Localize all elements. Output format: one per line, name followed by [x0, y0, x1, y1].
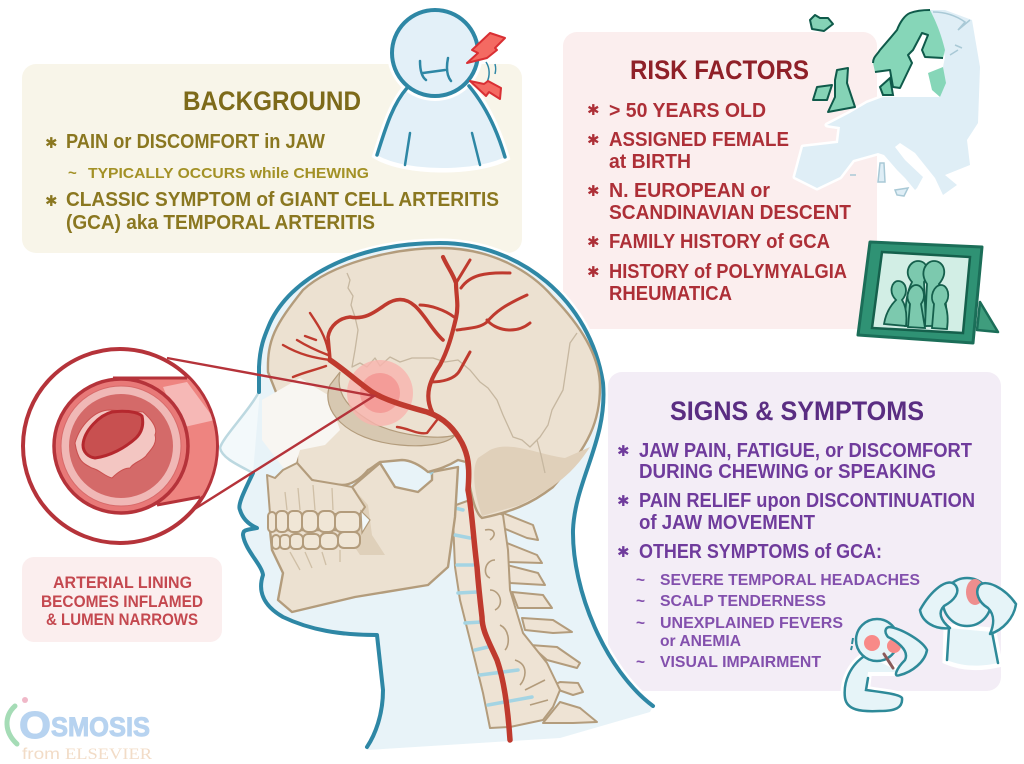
corsica sardinia sicily: [850, 163, 908, 196]
icon: person holding head: [920, 578, 1016, 666]
jaw joint cartilage: [430, 458, 466, 474]
heading: risk factors: RISK FACTORS: [630, 55, 809, 85]
heading: background: BACKGROUND: [183, 86, 361, 116]
symptoms list: ✱: [617, 543, 630, 561]
risk factor list: ✱: [587, 101, 600, 119]
symptoms list: OTHER SYMPTOMS of GCA:: [639, 541, 882, 563]
cranium: [268, 248, 600, 518]
symptoms list: SCALP TENDERNESS: [660, 593, 826, 610]
skull sutures: [347, 273, 577, 473]
icon: person with fever: [845, 619, 927, 711]
panel: arterial lining caption: & LUMEN NARROWS: [46, 611, 198, 629]
symptoms list: ~: [636, 615, 645, 632]
inflamed plaque: [75, 410, 156, 478]
zoom lines to magnified artery: [167, 358, 374, 510]
panel: risk factors: [563, 32, 877, 329]
symptoms list: ~: [636, 654, 645, 671]
risk factor list: ✱: [587, 233, 600, 251]
risk factor list: ASSIGNED FEMALE: [609, 129, 789, 151]
risk factor list: ✱: [587, 182, 600, 200]
symptoms list: ✱: [617, 492, 630, 510]
icon: person with jaw pain: [377, 10, 505, 168]
risk factor list: HISTORY of POLYMYALGIA: [609, 261, 847, 283]
maxilla: [267, 463, 365, 514]
background text: ✱: [45, 134, 58, 152]
logo wordmark: [19, 705, 150, 747]
panel: arterial lining caption: BECOMES INFLAMED: [41, 593, 203, 611]
risk factor list: N. EUROPEAN or: [609, 180, 770, 202]
background text: ~: [68, 165, 77, 182]
shaded back of skull: [474, 447, 590, 516]
background text: TYPICALLY OCCURS while CHEWING: [88, 165, 369, 182]
eye socket crescent: [328, 372, 455, 446]
background text: (GCA) aka TEMPORAL ARTERITIS: [66, 212, 375, 234]
cervical spine: [453, 500, 597, 728]
mandible shading: [350, 487, 385, 555]
logo subtext: [22, 746, 152, 763]
family silhouettes: [884, 261, 948, 329]
risk factor list: FAMILY HISTORY of GCA: [609, 231, 830, 253]
risk factor list: > 50 YEARS OLD: [609, 100, 766, 122]
heading: signs and symptoms: SIGNS & SYMPTOMS: [670, 396, 924, 426]
mandible: [270, 463, 458, 612]
head silhouette: [220, 243, 653, 750]
logo subtext: ELSEVIER: [65, 746, 152, 763]
map of europe: [795, 10, 980, 196]
logo wordmark: SMOSIS: [51, 712, 150, 742]
scandinavia highlighted: [873, 10, 946, 97]
icon: lightning bolts: [467, 33, 505, 99]
panel: background: [22, 64, 522, 253]
symptoms list: or ANEMIA: [660, 633, 741, 650]
temporal artery: [283, 257, 530, 740]
symptoms list: ~: [636, 572, 645, 589]
osmosis from elsevier logo: [7, 697, 152, 763]
risk factor list: SCANDINAVIAN DESCENT: [609, 202, 851, 224]
risk factor list: ✱: [587, 263, 600, 281]
symptoms list: VISUAL IMPAIRMENT: [660, 654, 822, 671]
risk factor list: [587, 100, 851, 305]
risk factor list: ✱: [587, 131, 600, 149]
risk factor list: at BIRTH: [609, 151, 691, 173]
united kingdom: [828, 68, 855, 112]
panel: arterial lining caption: [22, 557, 222, 642]
background text: CLASSIC SYMPTOM of GIANT CELL ARTERITIS: [66, 189, 499, 211]
risk factor list: RHEUMATICA: [609, 283, 732, 305]
panel: signs and symptoms: [608, 372, 1001, 691]
symptoms list: SEVERE TEMPORAL HEADACHES: [660, 572, 920, 589]
pain highlight: [347, 360, 413, 426]
background text: PAIN or DISCOMFORT in JAW: [66, 131, 325, 153]
symptoms list: PAIN RELIEF upon DISCONTINUATION: [639, 490, 975, 512]
tooth root lines: [285, 485, 340, 570]
vertebral column: [453, 500, 560, 728]
iceland: [810, 15, 833, 31]
ireland: [813, 85, 832, 100]
head with skull illustration: [220, 243, 653, 750]
kola outline: [933, 12, 970, 55]
symptoms list: UNEXPLAINED FEVERS: [660, 615, 843, 632]
artery tube: [113, 376, 216, 506]
symptoms list: ✱: [617, 442, 630, 460]
faded facial bone: [262, 378, 340, 470]
icon: family photo frame: [858, 242, 998, 343]
symptoms list: JAW PAIN, FATIGUE, or DISCOMFORT: [639, 440, 972, 462]
teeth: [268, 511, 360, 549]
logo subtext: from: [22, 746, 60, 763]
symptoms list: [617, 440, 975, 671]
symptoms list: DURING CHEWING or SPEAKING: [639, 461, 936, 483]
background text: ✱: [45, 192, 58, 210]
thermometer: [884, 654, 893, 668]
panel: arterial lining caption: ARTERIAL LINING: [53, 574, 192, 592]
narrowed lumen: [83, 411, 143, 458]
symptoms list: of JAW MOVEMENT: [639, 512, 815, 534]
jaw gap: [361, 511, 370, 533]
symptoms list: ~: [636, 593, 645, 610]
magnified artery cross-section: [23, 349, 225, 543]
logo wordmark: O: [19, 705, 51, 747]
background text: [45, 131, 499, 234]
